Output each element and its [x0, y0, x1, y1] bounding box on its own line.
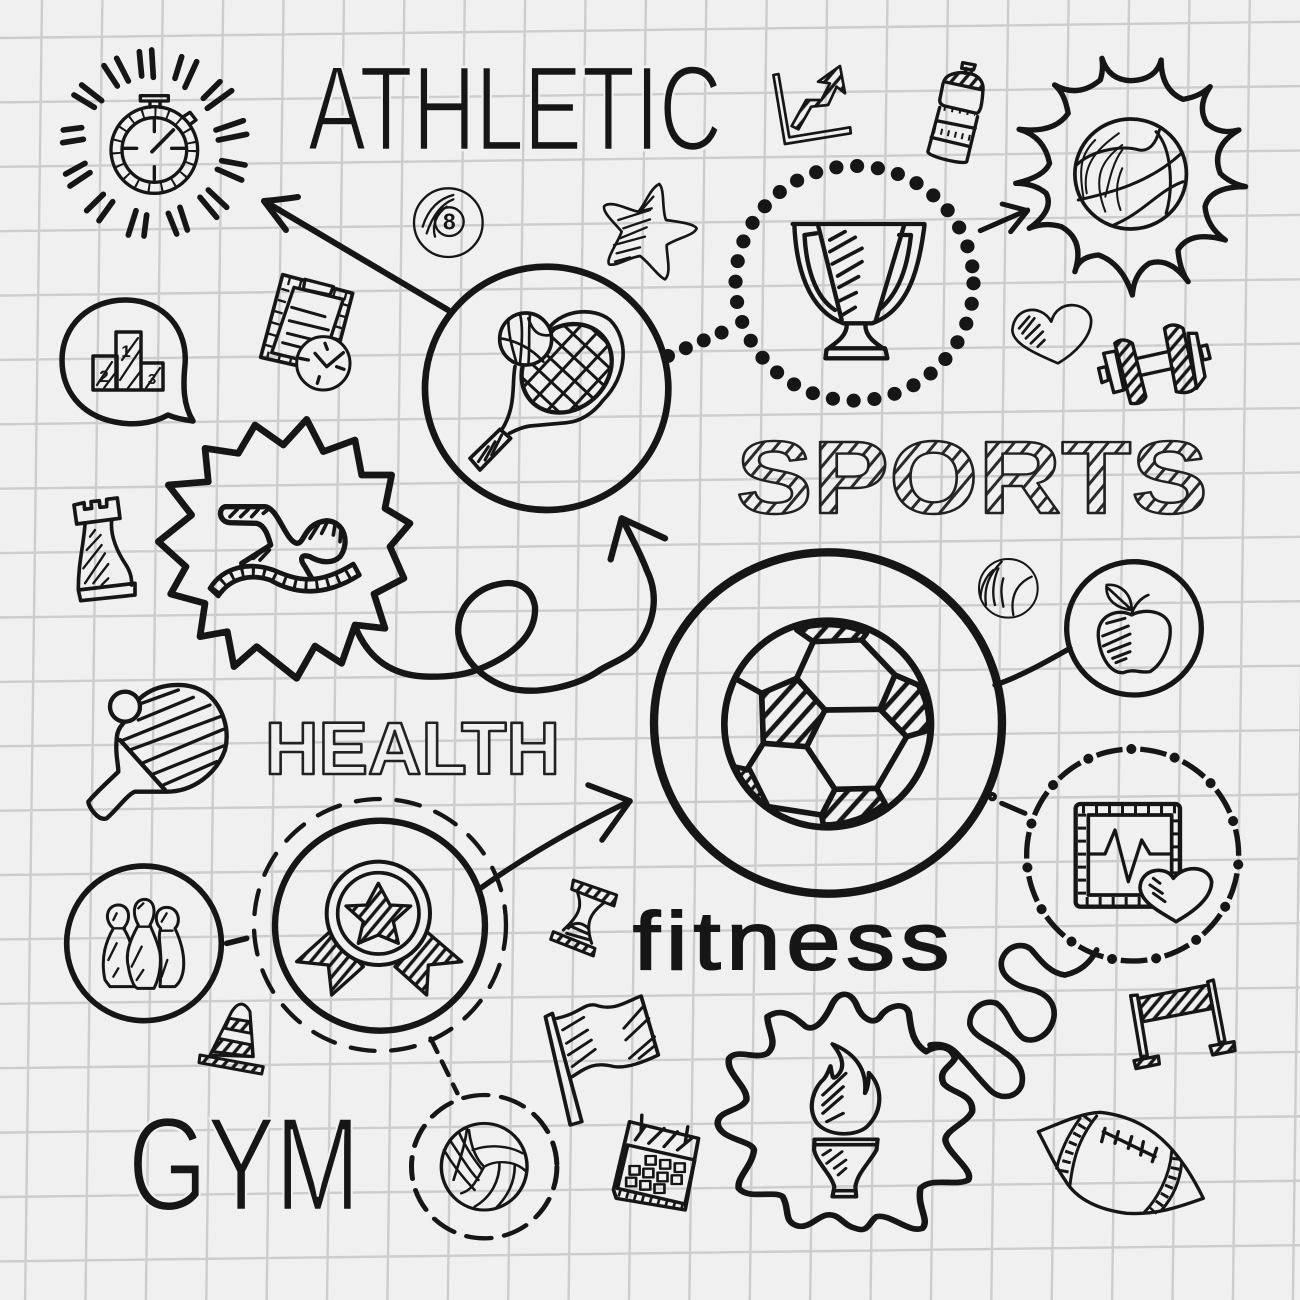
icon: american football — [1038, 1112, 1203, 1214]
icon: hurdle — [1131, 980, 1235, 1069]
arrow: looping arrow from swimmer to tennis — [357, 518, 665, 691]
icon: podium in speech bubble: 2 — [99, 367, 109, 386]
icon: swimmer in spiky burst — [158, 419, 410, 678]
icon: flag — [545, 996, 658, 1125]
icon: medal in double circle — [254, 799, 506, 1051]
icon: podium in speech bubble: 1 — [121, 342, 131, 361]
icon: star — [604, 184, 697, 279]
arrow: tennis to stopwatch — [264, 197, 448, 310]
icon: heart — [1012, 305, 1091, 363]
icon: soccer ball in double circle — [654, 552, 1002, 894]
icon: small tennis ball — [979, 559, 1038, 618]
icon: volleyball in dashed circle with connector — [411, 1038, 557, 1238]
icon: billiard eight ball — [414, 188, 483, 257]
heading: GYM: GYM — [128, 1091, 360, 1239]
heading: ATHLETIC: ATHLETIC — [308, 40, 722, 176]
icon: stopwatch with rays — [63, 50, 247, 236]
icon: growth chart with zigzag arrow — [773, 66, 851, 144]
icon: tennis racket in circle — [425, 267, 668, 510]
icon: trophy in dotted circle — [736, 166, 974, 401]
icon: clipboard with clock — [261, 275, 353, 390]
icon: dumbbell — [1099, 325, 1210, 404]
icon: ping pong paddle and ball — [88, 685, 227, 819]
icon: calendar — [614, 1115, 699, 1210]
dotted connector: tennis to trophy — [668, 332, 723, 356]
icon: apple in circle with connector — [995, 562, 1201, 695]
icon: podium in speech bubble: 3 — [148, 371, 156, 388]
heading: fitness: fitness — [633, 896, 949, 987]
icon: traffic cone — [199, 1004, 263, 1074]
heading: HEALTH: HEALTH — [265, 707, 560, 790]
wavy connector: monitor to torch — [930, 946, 1097, 1096]
icon: basketball in spiky burst — [1016, 58, 1246, 295]
icon: billiard eight ball: 8 — [443, 208, 456, 234]
icon: water bottle — [928, 63, 983, 162]
icon: hourglass — [551, 880, 617, 956]
icon: bowling pins in circle with connector — [67, 866, 247, 1021]
icon: podium in speech bubble — [62, 300, 193, 424]
heading: SPORTS: SPORTS — [736, 420, 1208, 535]
icon: flaming torch in wavy circle — [718, 994, 972, 1230]
arrow: medal to soccer ball — [478, 785, 630, 890]
icon: heart monitor in dash-dot circle with connector — [990, 727, 1261, 983]
icon: chess rook — [74, 498, 135, 601]
arrow: trophy to basketball — [980, 204, 1028, 232]
